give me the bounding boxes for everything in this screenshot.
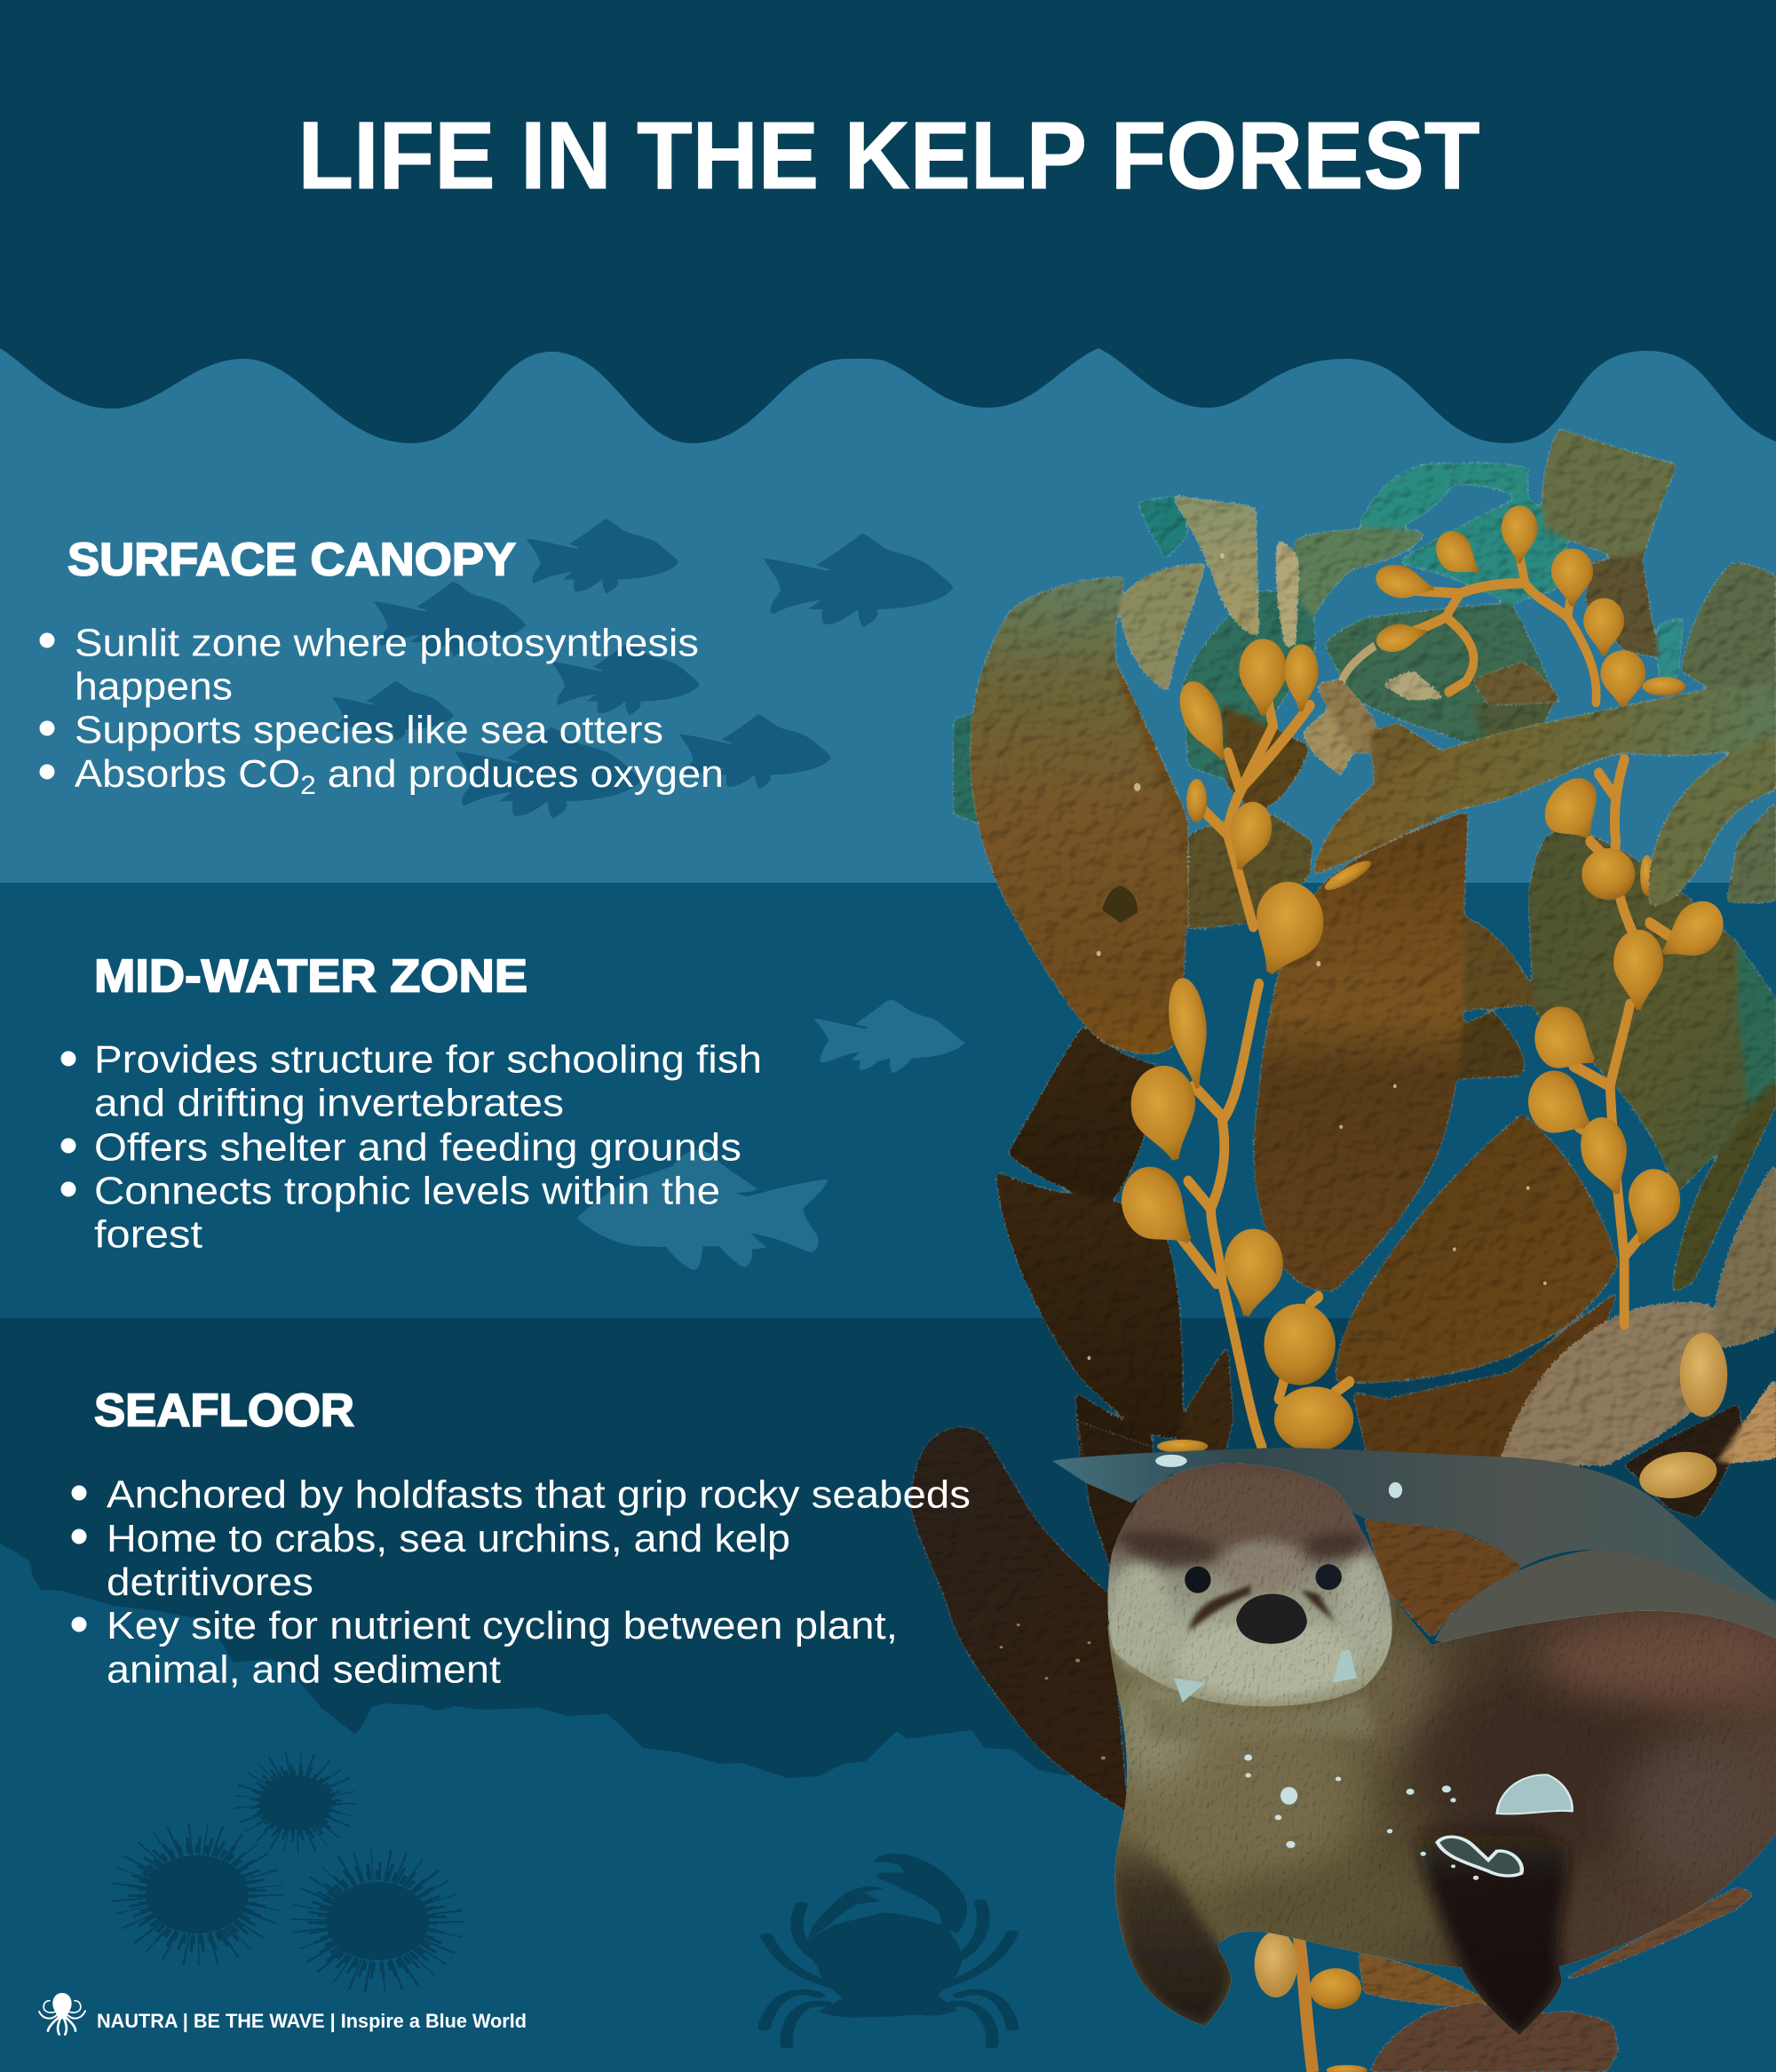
fish facing right: [813, 1000, 965, 1073]
crab legs: [765, 1902, 1012, 2045]
heading: seafloor: SEAFLOOR: [94, 1385, 354, 1437]
back warm highlight: [1539, 1621, 1776, 1701]
bullet list: surface canopy: happens: [75, 664, 233, 709]
bullet list: surface canopy: Supports species like sea otters: [75, 709, 663, 751]
bullet list: surface canopy: and produces oxygen: [316, 752, 724, 796]
air bubble large: [1497, 1774, 1573, 1814]
bullet list: seafloor: Key site for nutrient cycling between plant,: [107, 1604, 898, 1647]
footer tagline: NAUTRA | BE THE WAVE | Inspire a Blue World: [97, 2010, 527, 2032]
bullet list: mid-water zone: Offers shelter and feeding grounds: [94, 1126, 741, 1169]
neck fur: [1352, 1631, 1444, 1758]
water droplets at chin: [1174, 1649, 1357, 1703]
otter forehead reddish tone: [1138, 1474, 1329, 1536]
bullet list: mid-water zone: Connects trophic levels within the: [94, 1169, 720, 1213]
flank dark fur: [1409, 1670, 1703, 1864]
crab shell: [807, 1912, 962, 2018]
fish 3: [374, 582, 526, 656]
translucent water arch reflection: [1052, 1448, 1776, 1661]
panel: seafloor text: [71, 1385, 971, 1691]
bullet list: seafloor: animal, and sediment: [107, 1648, 501, 1691]
kelp behind otter head: [1078, 1421, 1154, 1581]
otter right eye: [1316, 1564, 1342, 1590]
urchin left: [131, 1839, 264, 1949]
seafloor zone band: [0, 1318, 1776, 2072]
otter right flipper: [1415, 1812, 1568, 2037]
fish 1: [764, 534, 953, 627]
otter body and head: [1103, 1461, 1776, 2037]
top header band background: [0, 0, 1776, 462]
fish 7: [455, 727, 640, 819]
bullet list: seafloor: Home to crabs, sea urchins, and kelp: [107, 1517, 790, 1560]
giant kelp photo cluster: [953, 428, 1776, 1465]
air bubble double: [1438, 1837, 1522, 1876]
sea urchin silhouettes: [131, 1767, 444, 1977]
otter face stripes: [1188, 1585, 1336, 1631]
pale float lower right: [1680, 1333, 1727, 1417]
heading: mid-water zone: MID-WATER ZONE: [94, 950, 527, 1002]
crab silhouette: [765, 1854, 1012, 2045]
bullet list: seafloor: [71, 1473, 971, 1691]
otter nose bridge: [1220, 1541, 1305, 1594]
title: LIFE IN THE KELP FOREST: [298, 101, 1479, 209]
crab big claw: [873, 1854, 967, 1933]
kelp pneumatocyst floats: [1109, 639, 1732, 1453]
bullet list: surface canopy: 2: [300, 771, 316, 800]
kelp pieces top right: [1624, 1377, 1776, 1519]
otter body base: [1103, 1461, 1776, 2037]
otter muzzle pale: [1174, 1623, 1355, 1698]
small bubbles: [1155, 1455, 1479, 1880]
kelp back blades: [953, 428, 1776, 1465]
fish silhouettes: mid-water zone: [577, 1000, 965, 1270]
otter head shape: [1107, 1463, 1392, 1706]
kelp seen through arch: [1364, 1519, 1522, 1639]
kelp speckles: [1088, 553, 1547, 1360]
otter right cheek pale: [1338, 1554, 1384, 1652]
mid-water zone band: [0, 883, 1776, 1318]
footer logo and tagline: [39, 1993, 527, 2035]
otter left eye: [1185, 1567, 1211, 1593]
sea otter photo group: [911, 1377, 1776, 2072]
crab small claw: [808, 1886, 884, 1939]
fish 5: [332, 681, 454, 741]
bullet list: surface canopy: Sunlit zone where photosynthesis: [75, 622, 699, 664]
bullet list: mid-water zone: forest: [94, 1213, 202, 1256]
surface canopy zone with wave edge: [0, 348, 1776, 883]
chest olive area: [1119, 1698, 1373, 1885]
panel: surface canopy text: [39, 535, 724, 800]
heading: surface canopy: SURFACE CANOPY: [67, 535, 516, 586]
pale float top right: [1631, 1444, 1724, 1505]
bullet list: surface canopy: [39, 622, 724, 800]
fish school silhouettes: surface canopy: [332, 519, 953, 819]
bullet list: mid-water zone: [60, 1037, 762, 1256]
right flank brown: [1624, 1736, 1772, 1886]
dark rock-like holdfast blade: [911, 1427, 1129, 1814]
icon: octopus logo: [39, 1993, 85, 2035]
seabed silhouette: [0, 1544, 1776, 2072]
bullet list: surface canopy: Absorbs CO: [75, 752, 288, 796]
urchin right: [311, 1865, 444, 1977]
bullet list: seafloor: detritivores: [107, 1560, 313, 1604]
fish 4: [551, 642, 700, 715]
otter left cheek pale: [1109, 1563, 1171, 1670]
otter back lump: [1434, 1550, 1776, 1661]
otter nose: [1236, 1594, 1307, 1644]
rock speckles: [1000, 1623, 1106, 1759]
kelp beneath otter: [1255, 1886, 1755, 2072]
chin shadow: [1143, 1692, 1376, 1741]
panel: mid-water zone text: [60, 950, 762, 1256]
bullet list: seafloor: Anchored by holdfasts that grip rocky seabeds: [107, 1473, 971, 1517]
fish 2: [527, 519, 678, 593]
lower belly: [1205, 1873, 1455, 1944]
otter left flipper: [1111, 1829, 1233, 2028]
otter brows: [1117, 1531, 1364, 1568]
kelp back stipes and floats: [1338, 505, 1685, 896]
blade hole: [1102, 885, 1138, 923]
left neck pale edge: [1114, 1670, 1193, 1784]
fish 6: [679, 714, 831, 789]
bullet list: mid-water zone: Provides structure for schooling fish: [94, 1037, 762, 1082]
fish facing left: [577, 1150, 829, 1270]
urchin top: [253, 1767, 338, 1838]
kelp front blades: [970, 495, 1776, 1465]
bullet list: mid-water zone: and drifting invertebrates: [94, 1082, 564, 1124]
kelp front stipes: [1177, 699, 1681, 1447]
